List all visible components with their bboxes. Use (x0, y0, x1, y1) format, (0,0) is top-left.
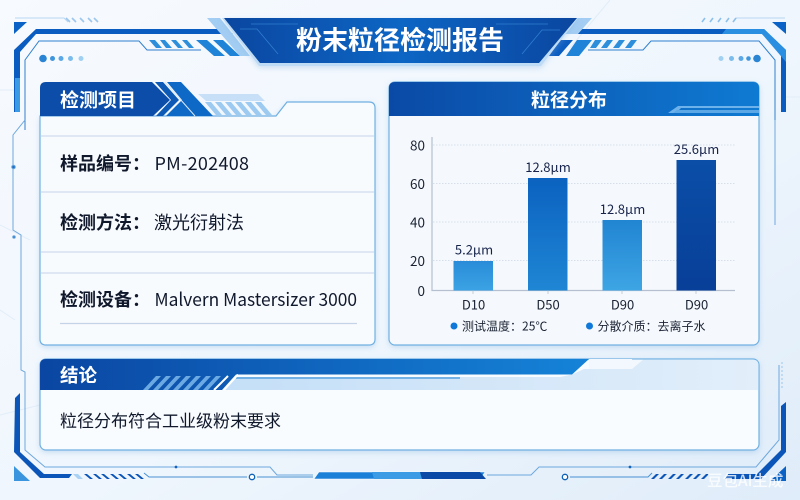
title text: 粉末粒径检测报告 (296, 20, 504, 58)
row: equipment: 检测设备： (60, 286, 150, 312)
panel header: particle size distribution: 粒径分布 (531, 86, 607, 112)
panel header: detection items (40, 82, 272, 116)
row: equipment (60, 286, 357, 312)
y axis labels: 20 (410, 250, 425, 270)
frame: right side connectors (487, 120, 782, 475)
bar D10 (454, 240, 493, 314)
panel: conclusion (40, 359, 759, 450)
bar chart (410, 134, 735, 314)
bar D10: 5.2μm (455, 240, 493, 258)
bar D90 second (674, 139, 719, 314)
row: test method: 检测方法： (60, 209, 150, 235)
row: sample number: PM-202408 (154, 150, 249, 176)
row: sample number: 样品编号： (60, 150, 150, 176)
title banner (207, 18, 592, 66)
bar D50: 12.8μm (525, 157, 571, 176)
y axis labels: 60 (410, 173, 425, 193)
row: equipment: Malvern Mastersizer 3000 (154, 286, 357, 312)
panel header: particle size distribution (389, 82, 759, 116)
y axis labels: 80 (410, 134, 425, 154)
legend: temperature: 测试温度：25℃ (462, 318, 547, 334)
y axis labels: 0 (418, 280, 425, 300)
bar D50 (525, 157, 571, 314)
row: sample number (60, 150, 249, 176)
bar D90 second: D90 (685, 294, 708, 314)
frame: top left (14, 18, 248, 130)
bar D50: D50 (536, 294, 560, 314)
heading: detection items: 检测项目 (60, 86, 136, 112)
y axis labels (410, 134, 425, 300)
y axis labels: 40 (410, 212, 425, 232)
bar D90 second: 25.6μm (674, 139, 719, 158)
bar D90 first: D90 (611, 294, 634, 314)
bar D90 first: 12.8μm (600, 199, 645, 218)
frame: top right (549, 18, 786, 130)
heading: conclusion: 结论 (60, 362, 98, 388)
indicator dots right (718, 55, 761, 62)
legend: dispersant: 分散介质：去离子水 (598, 318, 706, 334)
row: test method: 激光衍射法 (154, 209, 244, 235)
frame: bottom right (562, 402, 786, 481)
indicator dots left (39, 55, 84, 62)
watermark: 豆包AI生成 (707, 469, 783, 491)
panel header: conclusion (40, 359, 758, 390)
conclusion text: 粒径分布符合工业级粉末要求 (60, 407, 281, 432)
frame: left side connectors (12, 120, 313, 475)
frame: bottom center bar (314, 472, 486, 479)
row: test method (60, 209, 244, 235)
bar D90 first (600, 199, 645, 314)
bar D10: D10 (462, 294, 485, 314)
panel: particle size distribution (389, 82, 759, 345)
panel: detection items (40, 82, 375, 345)
frame: bottom left (14, 393, 313, 481)
